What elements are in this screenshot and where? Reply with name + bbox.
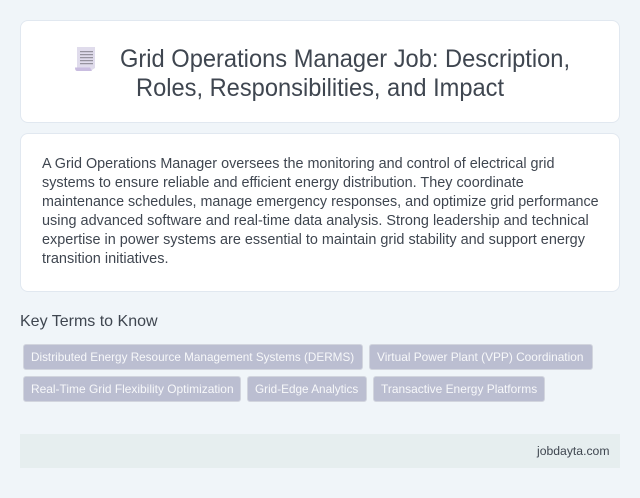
tag: transactive: Transactive Energy Platforms	[381, 382, 537, 396]
panel: title card	[20, 20, 620, 123]
footer bar	[20, 434, 620, 468]
text block: description: A Grid Operations Manager oversees the monitoring and control of electrical grid	[42, 156, 555, 172]
tag: VPP: Virtual Power Plant (VPP) Coordination	[377, 350, 583, 364]
tag: transactive	[373, 376, 545, 402]
text block: description: using advanced software and real-time data analysis. Strong leadership and technical	[42, 213, 589, 229]
panel: description card	[20, 133, 620, 292]
footer text: jobdayta.com	[537, 444, 610, 458]
panel: key term tags	[23, 344, 593, 402]
tag: flexibility: Real-Time Grid Flexibility Optimization	[31, 382, 234, 396]
tag: DERMS: Distributed Energy Resource Management Systems (DERMS)	[31, 350, 354, 364]
tag: DERMS	[23, 344, 363, 370]
title	[120, 45, 570, 102]
title: Roles, Responsibilities, and Impact	[136, 74, 504, 102]
tag: grid-edge: Grid-Edge Analytics	[255, 382, 358, 396]
tag: flexibility	[23, 376, 241, 402]
icon: document scroll	[75, 47, 95, 71]
text block: description: maintenance schedules, manage emergency responses, and optimize grid performance	[42, 194, 599, 210]
text block: description: transition initiatives.	[42, 251, 169, 267]
text block: description: systems to ensure reliable and efficient energy distribution. They coordinate	[42, 175, 524, 191]
tag: VPP	[369, 344, 593, 370]
title: Grid Operations Manager Job: Description,	[120, 45, 570, 73]
heading: key terms: Key Terms to Know	[20, 313, 158, 330]
text block: description: expertise in power systems are essential to maintain grid stability and support energy	[42, 232, 585, 248]
text block: description	[42, 156, 599, 267]
tag: grid-edge	[247, 376, 367, 402]
